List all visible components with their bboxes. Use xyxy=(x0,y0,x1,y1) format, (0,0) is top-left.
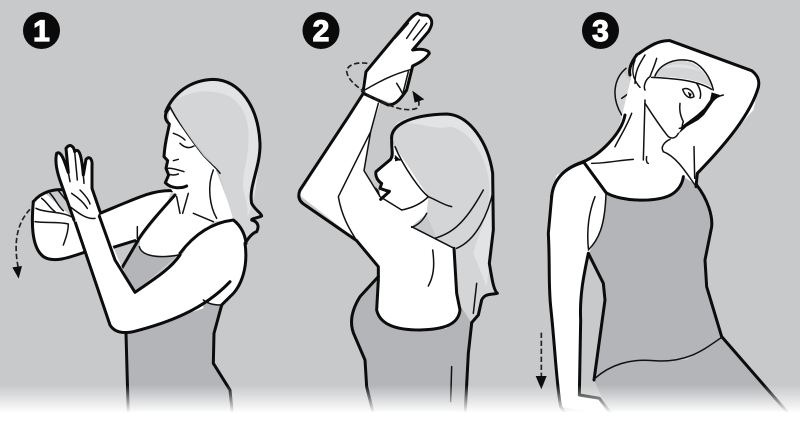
bun xyxy=(615,68,637,115)
number badge 2 xyxy=(302,12,340,49)
bottom fade xyxy=(0,385,800,413)
face xyxy=(375,142,428,227)
back skin xyxy=(338,133,460,330)
arrow: wrist bend down xyxy=(12,209,30,279)
figure 2: overhead arm twist xyxy=(299,13,497,417)
arrow: circular rotation xyxy=(347,63,424,110)
number badge 3: 3 xyxy=(592,15,609,48)
neck and collar lines xyxy=(177,170,217,222)
raised arm outline xyxy=(637,41,759,187)
face xyxy=(163,108,217,188)
top of tank xyxy=(588,173,722,380)
hand on head xyxy=(628,55,658,90)
chest and neck skin xyxy=(139,163,235,257)
number badge 3 xyxy=(582,12,619,49)
figure 3: neck side stretch xyxy=(536,40,788,417)
neck, chest and raised-arm skin xyxy=(583,40,759,200)
hair xyxy=(392,113,497,323)
neck lines xyxy=(552,100,670,197)
hair top xyxy=(653,60,713,90)
number badge 2: 2 xyxy=(313,15,329,48)
face xyxy=(645,77,720,138)
left arm xyxy=(548,162,611,415)
number badge 1 xyxy=(23,12,60,49)
torso tank top xyxy=(121,238,233,417)
lower body xyxy=(594,337,788,417)
body outlines lower xyxy=(351,277,472,417)
hair xyxy=(166,79,262,243)
tank top straps and neckline xyxy=(122,195,178,268)
arrow: arm down xyxy=(536,333,547,389)
figure 1: wrist stretch xyxy=(12,79,262,417)
torso tank top xyxy=(351,277,472,417)
number badge 1: 1 xyxy=(33,15,50,48)
hands pressed together xyxy=(348,13,432,117)
fist xyxy=(33,190,74,218)
body outline xyxy=(588,185,788,413)
raised hand xyxy=(56,146,100,222)
back arm xyxy=(32,191,172,261)
straps and neckline xyxy=(583,152,695,200)
front arm xyxy=(75,213,247,417)
raised arms xyxy=(299,92,460,330)
